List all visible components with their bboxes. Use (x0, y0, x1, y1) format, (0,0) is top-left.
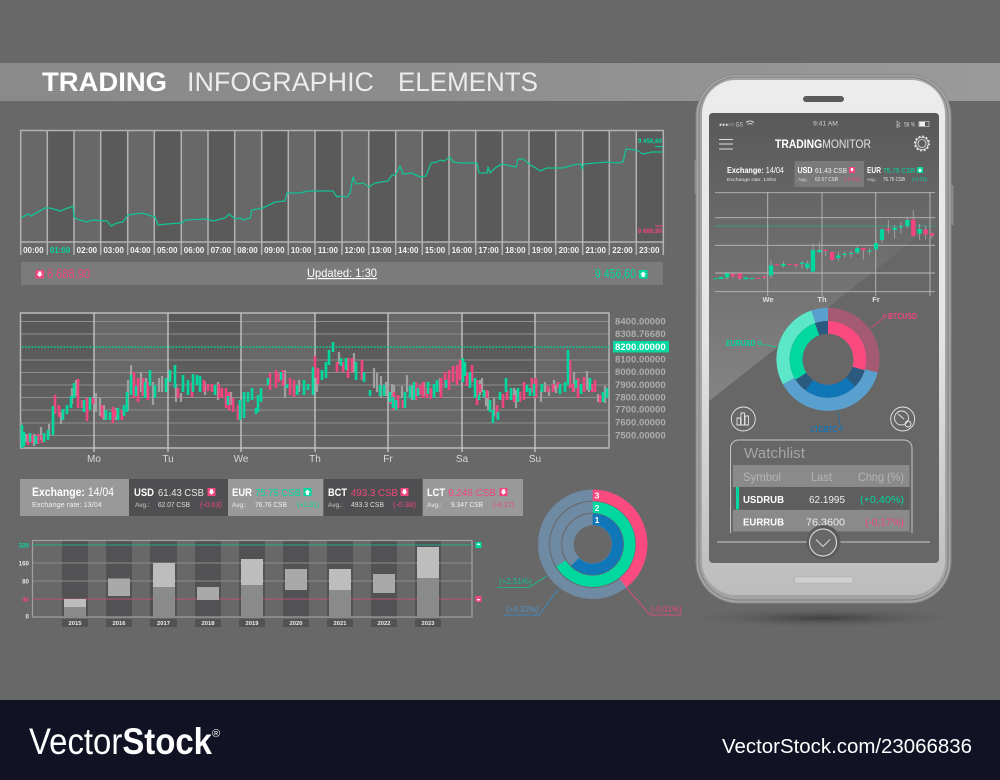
label: EURUSD (726, 339, 776, 348)
ring numbers: 1 (595, 515, 600, 525)
row: EURRUB: (-0,17%) (865, 516, 904, 528)
year labels: 2016 (113, 621, 126, 627)
LCT card: Avg.: (427, 502, 442, 509)
weekly candlestick chart (20, 313, 669, 465)
EUR quote: Avg.: (867, 177, 877, 182)
day labels: Mo (87, 454, 101, 465)
status bar: 58 % (904, 122, 915, 128)
candlestick chart (715, 192, 935, 304)
row: EURRUB: 76.3600 (806, 516, 845, 528)
table header: Last (811, 470, 833, 484)
price axis: 7800.00000 (615, 392, 666, 404)
LCT card (423, 479, 523, 516)
year labels: 2020 (290, 621, 302, 627)
price axis: 8308.76680 (615, 329, 666, 340)
screen (709, 113, 939, 563)
watchlist panel (730, 440, 912, 533)
EUR quote: (+1.01) (912, 177, 927, 183)
hour labels: 16:00 (452, 246, 473, 255)
row: USDRUB: 62.1995 (809, 494, 845, 506)
USD card: (-0.63) (200, 500, 222, 509)
title: infographic: INFOGRAPHIC (187, 67, 374, 97)
EUR card: Avg.: (232, 502, 247, 509)
exchange date (727, 166, 785, 183)
status bar: 9:41 AM (813, 120, 838, 128)
day labels: Fr (383, 454, 393, 465)
USD quote: (-0.63) (844, 177, 860, 183)
day labels: Sa (456, 454, 469, 465)
table header (733, 465, 910, 487)
BCT card (324, 479, 422, 516)
hour labels: 15:00 (425, 246, 446, 255)
status bar (719, 120, 929, 128)
callout: +2.51%: (+2.51%) (499, 577, 532, 586)
row: USDRUB (733, 487, 910, 510)
icon: bars (731, 407, 755, 431)
price axis (615, 316, 666, 442)
USD quote: 61.43 CSB (815, 166, 847, 175)
row: EURRUB: EURRUB (743, 516, 784, 528)
USD quote: Avg.: (798, 177, 808, 182)
callout: +2.51% (497, 576, 547, 588)
BCT card: (-0.38) (393, 500, 417, 509)
status bar (21, 262, 663, 285)
USD card: Avg.: (135, 502, 150, 509)
hour labels: 17:00 (478, 246, 499, 255)
hour labels: 09:00 (264, 246, 285, 255)
USD quote: 62.07 CSB (815, 177, 839, 183)
EUR card: EUR (232, 487, 252, 499)
exchange ticker row (20, 479, 523, 516)
ring 2 (561, 507, 630, 581)
BCT card: BCT (328, 487, 347, 499)
phone body (694, 74, 954, 603)
label: BTCUSD: BTCUSD (888, 312, 917, 321)
callout: +0.32%: (+0.32%) (506, 605, 539, 614)
price axis: 7900.00000 (615, 380, 666, 391)
day labels: We (234, 454, 249, 465)
highlighted price: 8200.00000 (615, 342, 666, 353)
phone shadow (673, 607, 973, 629)
hour labels: 08:00 (237, 246, 258, 255)
ring bases (538, 490, 647, 599)
EUR quote: 75.75 CSB (883, 166, 915, 175)
exchange date card: Exchange rate: 13/04 (32, 502, 102, 509)
EUR quote: 76.76 CSB (883, 177, 906, 183)
EUR quote: EUR (867, 166, 881, 175)
hour labels: 01:00 (50, 246, 71, 255)
value axis: 80 (22, 578, 30, 586)
USD card: USD (134, 487, 154, 499)
watermark footer (0, 700, 1000, 780)
exchange date card: Exchange: 14/04 (32, 487, 115, 499)
hour labels: 07:00 (211, 246, 232, 255)
pink candles (28, 356, 600, 445)
status bar: ●●●○○ GS (719, 122, 743, 128)
app title: TRADINGMONITOR (775, 139, 871, 151)
price axis: 8400.00000 (615, 316, 666, 328)
hour labels: 12:00 (344, 246, 365, 255)
day labels: Tu (162, 454, 174, 465)
outer ring (783, 314, 873, 404)
upper limit icon (476, 542, 482, 548)
value axis: 320 (19, 542, 30, 550)
EUR quote (867, 166, 927, 183)
axis labels: Th (817, 295, 827, 304)
label: BTCUSD (871, 312, 917, 328)
hour labels: 02:00 (77, 246, 98, 255)
updated time: Updated: 1:30 (307, 266, 377, 280)
high value: 9 456,60 (595, 267, 636, 281)
low marker: 6 688,90 (638, 228, 662, 235)
bars (64, 547, 439, 617)
table header: Chng (%) (858, 470, 904, 484)
green candles (22, 342, 607, 448)
row: EURRUB (733, 510, 910, 532)
hour labels: 10:00 (291, 246, 312, 255)
phone mockup (694, 74, 954, 603)
hourly line chart panel (21, 130, 663, 255)
menu icon (719, 140, 733, 149)
LCT card: (-0.17) (493, 500, 514, 509)
low value: 6 688,90 (47, 267, 90, 281)
exchange date: Exchange: 14/04 (727, 166, 785, 175)
label: LTCBTC (811, 412, 842, 434)
row: USDRUB: USDRUB (743, 494, 784, 506)
hour labels: 06:00 (184, 246, 205, 255)
high marker: 9 456,60 (638, 138, 662, 145)
title banner (0, 63, 1000, 101)
year labels: 2015 (69, 621, 82, 627)
axis labels: Fr (872, 295, 880, 304)
earpiece (803, 96, 844, 102)
expand control (717, 525, 930, 562)
hour labels: 23:00 (639, 246, 660, 255)
registered mark: ® (212, 728, 220, 740)
callout: -0.01% (626, 587, 682, 615)
hour labels: 18:00 (505, 246, 526, 255)
year labels: 2018 (202, 621, 215, 627)
USD card (129, 479, 228, 516)
pair donut chart (783, 314, 873, 404)
ring 3 (593, 495, 642, 583)
hour labels: 20:00 (559, 246, 580, 255)
year labels (62, 619, 441, 627)
ring numbers (595, 490, 600, 525)
title: trading: TRADING (42, 67, 167, 97)
hour labels: 00:00 (23, 246, 44, 255)
EUR card (228, 479, 323, 516)
exchange date: Exchange rate: 13/04 (727, 177, 776, 183)
day labels (87, 454, 541, 465)
day labels: Su (529, 454, 541, 465)
row: USDRUB: (+0,40%) (860, 494, 904, 506)
EUR card: (+1.01) (297, 500, 319, 509)
value axis: 160 (19, 560, 30, 568)
settings icon (915, 136, 929, 151)
axis labels (762, 295, 880, 304)
USD card: 61.43 CSB (158, 487, 204, 499)
day labels: Th (309, 454, 321, 465)
exchange date card (20, 479, 129, 516)
LCT card: LCT (427, 487, 445, 499)
price axis: 7600.00000 (615, 418, 666, 428)
hour labels (23, 246, 660, 255)
hour labels: 11:00 (318, 246, 338, 255)
hour labels: 14:00 (398, 246, 419, 255)
hour labels: 05:00 (157, 246, 178, 255)
year labels: 2017 (157, 621, 170, 627)
USD quote (794, 161, 864, 187)
callout: +0.32% (504, 589, 559, 615)
ring chart (497, 490, 682, 615)
gray candles (21, 352, 605, 446)
yearly bar chart (19, 540, 482, 627)
label: LTCBTC: LTCBTC (811, 425, 837, 434)
value axis: 40 (22, 596, 30, 604)
BCT card: Avg.: (328, 502, 343, 509)
price axis: 7500.00000 (615, 430, 666, 442)
logo: VectorStock (29, 721, 212, 762)
LCT card: 9.347 CSB (451, 500, 483, 509)
table header: Symbol (743, 470, 781, 484)
lower limit icon (476, 596, 482, 602)
icon: gauge (891, 407, 915, 431)
watchlist heading: Watchlist (744, 445, 806, 462)
LCT card: 9.246 CSB (448, 487, 496, 499)
price axis: 8100.00000 (615, 354, 666, 366)
BCT card: 493.3 CSB (351, 500, 384, 509)
hour labels: 04:00 (130, 246, 151, 255)
year labels: 2023 (422, 621, 435, 627)
callout: -0.01%: (-0,01%) (651, 605, 682, 614)
price axis: 7700.00000 (615, 404, 666, 416)
axis labels: We (762, 295, 774, 304)
value axis (19, 542, 30, 620)
title: elements: ELEMENTS (398, 67, 538, 97)
USD card: 62.07 CSB (158, 500, 190, 509)
ring 1 (575, 519, 618, 569)
value axis: 0 (26, 614, 30, 620)
BCT card: 493.3 CSB (351, 487, 398, 499)
hour labels: 21:00 (585, 246, 606, 255)
hour labels: 13:00 (371, 246, 392, 255)
price line (21, 149, 663, 226)
USD quote: USD (798, 166, 813, 175)
hour labels: 03:00 (103, 246, 124, 255)
home button (794, 577, 853, 583)
label: EURUSD: EURUSD (726, 339, 756, 348)
EUR card: 76.76 CSB (255, 500, 287, 509)
EUR card: 75.75 CSB (255, 487, 301, 499)
ring numbers: 3 (595, 490, 600, 500)
hour labels: 22:00 (612, 246, 633, 255)
year labels: 2022 (378, 621, 390, 627)
inner ring (796, 327, 860, 391)
year labels: 2021 (334, 621, 347, 627)
image id: VectorStock.com/23066836 (722, 736, 972, 758)
ring numbers: 2 (595, 503, 600, 513)
candles (716, 210, 932, 280)
price axis: 8000.00000 (615, 367, 666, 378)
hour labels: 19:00 (532, 246, 553, 255)
year labels: 2019 (246, 621, 259, 627)
